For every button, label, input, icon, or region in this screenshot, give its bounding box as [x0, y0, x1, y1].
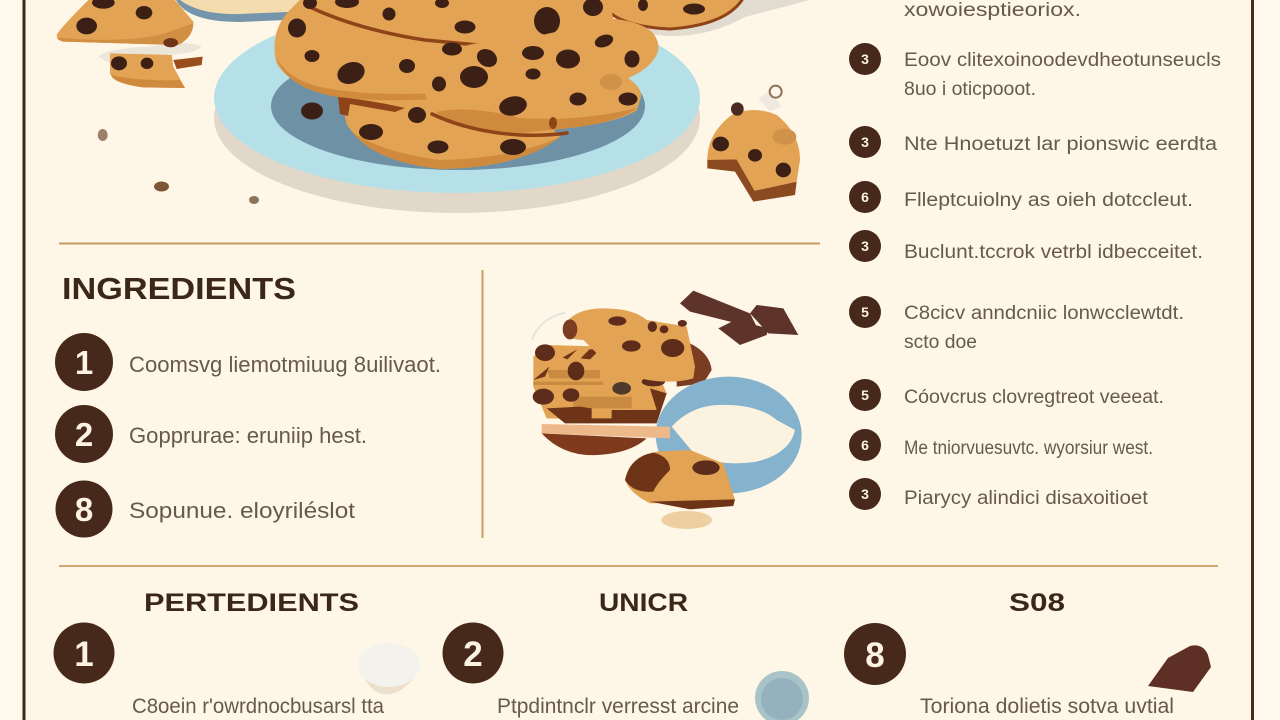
vertical divider — [482, 270, 484, 538]
step 5 — [849, 296, 1184, 353]
back cookie — [677, 343, 712, 387]
icon: chocolate — [1148, 645, 1211, 692]
step 5: scto doe — [904, 332, 977, 353]
large left cookie — [274, 0, 620, 116]
plate — [214, 3, 700, 193]
number badge 1: 1 — [74, 635, 94, 674]
step 6: 5 — [861, 387, 869, 403]
step 3: Flleptcuiolny as oieh dotccleut. — [904, 190, 1193, 211]
panel: unicr column — [442, 589, 809, 720]
ingredient 3: 8 — [75, 491, 93, 528]
number badge 2: 2 — [463, 635, 483, 674]
step 3: 6 — [861, 189, 869, 205]
ingredient 3 — [56, 480, 355, 538]
step 5: 5 — [861, 304, 869, 320]
number badge 2 — [442, 622, 504, 684]
step 1: Eoov clitexoinoodevdheotunseucls — [904, 50, 1221, 71]
upper right cookie — [606, 0, 742, 30]
hero illustration: plate of cookies — [57, 0, 810, 213]
step 6: Cóovcrus clovregtreot veeeat. — [904, 387, 1164, 408]
step 4 — [849, 230, 1203, 263]
step 8: 3 — [861, 486, 869, 502]
left cookie piece — [57, 0, 202, 63]
step text continued from above: xowoiesptieoriox. — [904, 0, 1081, 21]
step 6 — [849, 379, 1164, 411]
step 7: 6 — [861, 437, 869, 453]
step 2 — [849, 126, 1217, 158]
ingredient 1 — [55, 333, 441, 391]
bottom divider — [59, 565, 1218, 567]
ingredient 2: Gopprurae: eruniip hest. — [129, 423, 367, 448]
heading: PERTEDIENTS — [144, 589, 359, 617]
bitten cookie — [707, 86, 800, 202]
step 4: 3 — [861, 238, 869, 254]
icon: flour — [358, 643, 420, 694]
number badge 1 — [54, 622, 114, 684]
step 8: Piarycy alindici disaxoitioet — [904, 488, 1149, 509]
top divider — [59, 242, 820, 244]
cookie stack — [533, 344, 667, 423]
bottom cookie — [338, 90, 560, 169]
right middle cookie — [420, 18, 658, 135]
panel: pertedients column — [54, 589, 420, 718]
caption: Toriona dolietis sotva uvtial — [920, 695, 1174, 718]
ingredient 2: 2 — [75, 416, 93, 453]
step 3 — [849, 181, 1193, 213]
icon: blue bowl — [755, 671, 809, 720]
crumb — [661, 511, 712, 529]
number badge 3: 8 — [865, 636, 885, 675]
number badge 3 — [844, 623, 906, 685]
illustration: cookies, flour bowl and chocolate — [532, 291, 802, 529]
step 7: Me tniorvuesuvtc. wyorsiur west. — [904, 438, 1153, 459]
step 8 — [849, 478, 1149, 510]
caption: C8oein r'owrdnocbusarsl tta — [132, 695, 384, 718]
heading: ingredients: INGREDIENTS — [62, 271, 296, 306]
crumbs — [98, 129, 259, 204]
ingredient 3: Sopunue. eloyriléslot — [129, 498, 355, 523]
wooden dish — [542, 424, 670, 455]
loose chip on plate — [301, 102, 323, 120]
step 7 — [849, 429, 1153, 461]
step 1: 8uo i oticpooot. — [904, 79, 1036, 100]
top cookie of stack — [563, 308, 695, 382]
small bowl behind the stack — [176, 0, 300, 22]
ingredient 1: Coomsvg liemotmiuug 8uilivaot. — [129, 352, 441, 377]
step 2: 3 — [861, 134, 869, 150]
step 2: Nte Hnoetuzt lar pionswic eerdta — [904, 134, 1217, 155]
plate centre — [271, 42, 645, 170]
step 5: C8cicv anndcniic lonwcclewtdt. — [904, 303, 1184, 324]
heading: S08 — [1009, 589, 1065, 617]
panel: ingredients — [55, 271, 441, 538]
step 1 — [849, 43, 1221, 100]
step 1: 3 — [861, 51, 869, 67]
flour bowl — [656, 377, 802, 493]
chocolate chunks — [680, 291, 798, 345]
plate shadow — [214, 23, 700, 213]
step 4: Buclunt.tccrok vetrbl idbecceitet. — [904, 242, 1203, 263]
panel: s08 column — [844, 589, 1211, 718]
panel: steps list — [849, 0, 1221, 510]
broken cookie piece — [110, 53, 203, 88]
ingredient 1: 1 — [75, 344, 93, 381]
heading: UNICR — [599, 589, 688, 617]
front cookie piece — [625, 450, 735, 509]
ingredient 2 — [55, 405, 367, 463]
caption: Ptpdintnclr verresst arcine — [497, 695, 739, 718]
shadow of upper right cookie — [600, 0, 810, 36]
